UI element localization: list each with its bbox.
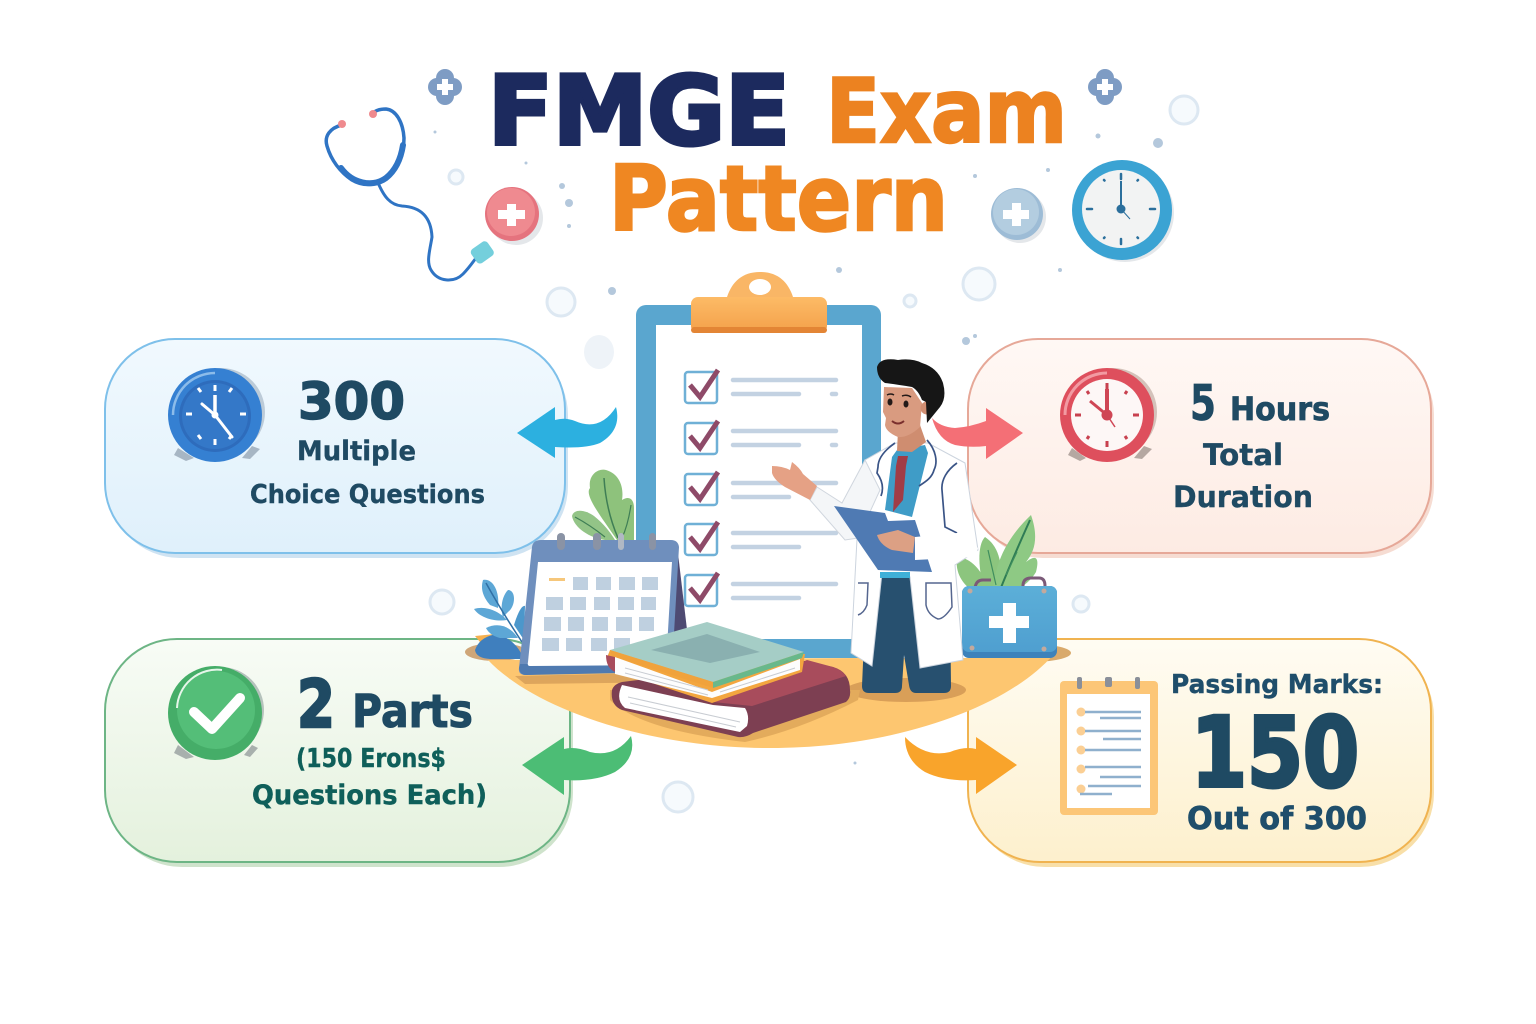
- text: 5 Hours: [1190, 375, 1330, 432]
- doctor: [772, 359, 978, 693]
- arrow: green to card 3: [522, 736, 632, 795]
- plant: green behind calendar: [572, 470, 634, 540]
- icon: blue plus button: [991, 188, 1046, 243]
- checklist rows: [685, 370, 836, 606]
- pointing hand: [772, 462, 817, 500]
- holding hand: [877, 530, 915, 553]
- clipboard with checklist: [636, 272, 881, 658]
- pointing arm sleeve: [810, 460, 880, 540]
- text: 5 Hours: Hours: [1230, 390, 1330, 428]
- title: Exam: [826, 60, 1067, 163]
- text: 2 Parts: [297, 666, 473, 743]
- panel: 5 hours total duration: [968, 339, 1434, 558]
- platform: [465, 643, 1071, 748]
- neck and face: [883, 387, 934, 452]
- stethoscope and coat lines: [877, 440, 957, 533]
- text: Multiple: Multiple: [297, 436, 416, 467]
- icon: red plus button: [485, 187, 543, 245]
- icon: plus flower left: [428, 69, 462, 105]
- calendar: [519, 533, 690, 675]
- lower book: [612, 660, 850, 737]
- panel: 2 parts: [105, 639, 573, 867]
- background bubbles: [430, 96, 1198, 812]
- text: 150: 150: [1191, 697, 1359, 809]
- text: Duration: Duration: [1173, 480, 1313, 514]
- text: Passing Marks: Passing Marks:: [1171, 670, 1383, 700]
- icon: notepad: [1060, 677, 1158, 815]
- plant: blue leaves: [474, 580, 525, 659]
- icon: plus flower right: [1088, 69, 1122, 105]
- lab coat: [851, 443, 978, 668]
- text: 300: 300: [298, 373, 405, 432]
- plant: green behind medkit: [957, 515, 1037, 592]
- text: Total: Total: [1203, 438, 1283, 472]
- upper book: [608, 650, 805, 703]
- title: [488, 57, 1067, 252]
- text: 2 Parts: 2: [297, 666, 335, 743]
- stack of books: [606, 622, 850, 737]
- hair: [877, 359, 944, 423]
- title: FMGE: [488, 57, 790, 167]
- icon: blue alarm clock: [168, 368, 265, 462]
- arrow: orange to card 4: [905, 737, 1017, 794]
- text: 5 Hours: 5: [1190, 375, 1216, 432]
- icon: stethoscope: [326, 109, 495, 280]
- blue folder: [834, 506, 932, 572]
- title: Pattern: [609, 147, 948, 252]
- text: Out of 300: Out of 300: [1187, 801, 1367, 837]
- arrow: blue to card 1: [517, 407, 617, 458]
- icon: wall clock: [1072, 160, 1174, 262]
- panel: passing marks: [968, 639, 1434, 867]
- coat pockets: [858, 583, 952, 619]
- text: Choice Questions: Choice Questions: [250, 480, 485, 510]
- text: 2 Parts: Parts: [352, 685, 473, 738]
- text: Questions Each: Questions Each): [252, 780, 487, 811]
- medical kit: [962, 578, 1057, 658]
- arrow: red to card 2: [932, 408, 1023, 459]
- text: 150 Erons: (150 Erons$: [296, 744, 446, 774]
- icon: red alarm clock: [1060, 368, 1157, 462]
- right sleeve: [915, 533, 978, 560]
- icon: green check badge: [168, 666, 264, 760]
- shirt and tie: [880, 445, 928, 578]
- panel: 300 multiple choice questions: [105, 339, 568, 558]
- trousers: [862, 575, 951, 693]
